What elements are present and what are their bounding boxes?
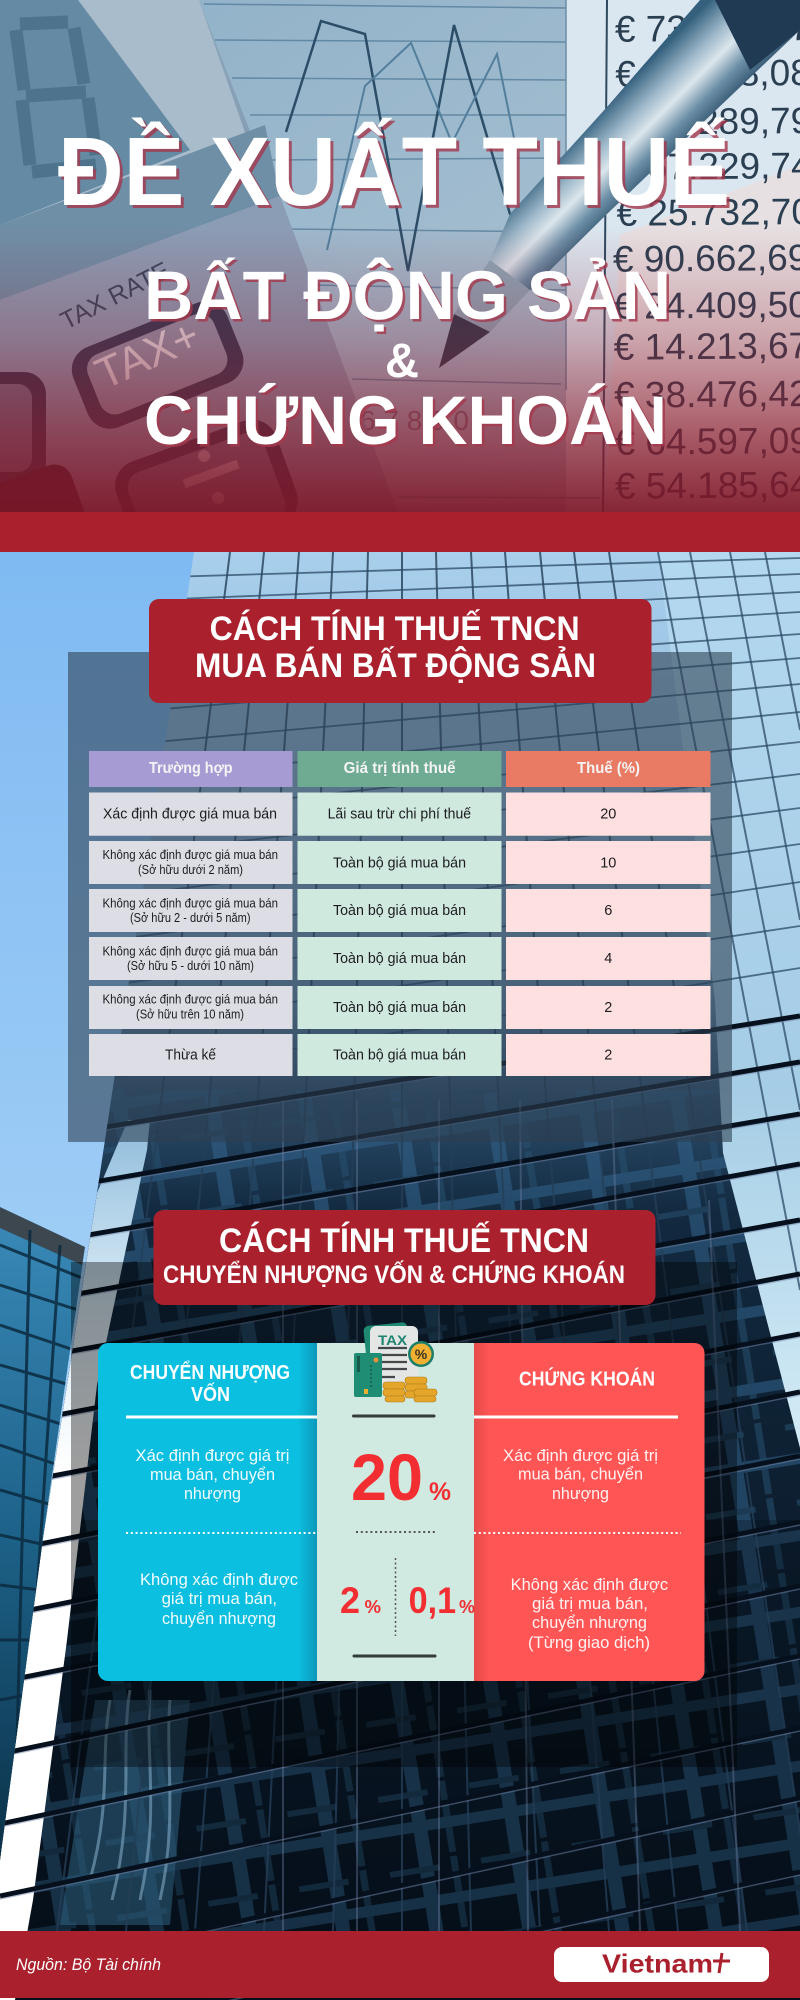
section heading: real estate: [149, 599, 652, 703]
table header row: Giá trị tính thuế: [344, 760, 456, 777]
card: capital transfer: giá trị mua bán,: [162, 1589, 277, 1608]
card: securities: mua bán, chuyển: [518, 1464, 643, 1484]
table header row: [89, 751, 710, 787]
table text: Lãi sau trừ chi phí thuế: [328, 806, 471, 822]
hero photo: calculator, chart, pen and figures: 6 7 8 9 0: [360, 405, 469, 436]
table text: Thừa kế: [165, 1048, 216, 1064]
card: capital transfer: Xác định được giá trị: [136, 1446, 290, 1465]
card: capital transfer: CHUYỂN NHƯỢNG: [130, 1361, 290, 1384]
rate: 2 percent: 2: [340, 1580, 360, 1621]
table header row: Trường hợp: [149, 760, 233, 777]
logo: Vietnam+: [554, 1947, 769, 1982]
card: capital transfer: nhượng: [184, 1484, 241, 1503]
card: capital transfer: mua bán, chuyển: [150, 1465, 275, 1484]
table text: Không xác định được giá mua bán: [102, 945, 278, 959]
rate: 2 percent: %: [364, 1597, 381, 1617]
table text: Không xác định được giá mua bán: [102, 896, 278, 910]
section heading: capital transfer and securities: CHUYỂN NHƯỢNG VỐN & CHỨNG KHOÁN: [163, 1259, 625, 1289]
icon: tax document, card and coins: %: [415, 1346, 428, 1362]
hero title: BẤT ĐỘNG SẢN: [146, 260, 674, 336]
hero title: CHỨNG KHOÁN: [144, 382, 667, 459]
hero title: CHỨNG KHOÁN: [146, 384, 670, 462]
table text: (Sở hữu 2 - dưới 5 năm): [130, 911, 250, 925]
section heading: capital transfer and securities: [154, 1210, 656, 1305]
hero title: ĐỀ XUẤT THUẾ: [58, 117, 730, 226]
source note: Nguồn: Bộ Tài chính: [16, 1955, 161, 1974]
table text: 2: [604, 1000, 612, 1016]
hero title: &: [385, 335, 419, 388]
card: securities: [474, 1343, 705, 1681]
table text: [102, 806, 616, 1064]
table text: Toàn bộ giá mua bán: [333, 1000, 466, 1016]
hero photo: calculator, chart, pen and figures: TAX+: [88, 310, 207, 399]
logo: Vietnam+: Vietnam: [602, 1948, 713, 1978]
section heading: capital transfer and securities: CÁCH TÍNH THUẾ TNCN: [219, 1222, 589, 1260]
tax table: [89, 751, 710, 1076]
table text: 10: [600, 856, 616, 872]
footer bar: [0, 1931, 800, 1998]
table text: Toàn bộ giá mua bán: [333, 1048, 466, 1064]
section heading: real estate: MUA BÁN BẤT ĐỘNG SẢN: [195, 646, 596, 685]
rate: 0,1 percent: 0,1: [409, 1580, 456, 1621]
table text: Không xác định được giá mua bán: [102, 848, 278, 862]
icon: tax document, card and coins: TAX: [378, 1333, 407, 1348]
card: securities: Không xác định được: [511, 1575, 669, 1594]
card: capital transfer: [98, 1343, 317, 1681]
table text: Toàn bộ giá mua bán: [333, 951, 466, 967]
rate: 2 percent: [340, 1580, 381, 1621]
rate: 20 percent: %: [429, 1478, 451, 1506]
table text: Xác định được giá mua bán: [103, 806, 277, 822]
hero photo: calculator, chart, pen and figures: TAX RATE: [56, 257, 174, 335]
table header row: Thuế (%): [577, 760, 640, 777]
card: securities: chuyển nhượng: [532, 1613, 647, 1632]
table text: (Sở hữu trên 10 năm): [136, 1008, 244, 1022]
table text: 20: [600, 806, 616, 822]
table text: (Sở hữu 5 - dưới 10 năm): [127, 959, 254, 973]
comparison cards: [98, 1343, 705, 1681]
hero title: [58, 117, 733, 462]
card: securities: nhượng: [552, 1484, 609, 1503]
table column fills: [89, 792, 710, 1076]
card: capital transfer: chuyển nhượng: [162, 1609, 276, 1628]
red band: [0, 512, 800, 552]
section heading: real estate: CÁCH TÍNH THUẾ TNCN: [210, 610, 580, 648]
hero title: BẤT ĐỘNG SẢN: [144, 257, 671, 334]
card: securities: giá trị mua bán,: [532, 1594, 648, 1613]
card: capital transfer: Không xác định được: [140, 1570, 298, 1589]
rate: 0,1 percent: %: [459, 1597, 475, 1617]
card: securities: CHỨNG KHOÁN: [519, 1367, 655, 1391]
card: securities: Xác định được giá trị: [503, 1446, 658, 1465]
card: capital transfer: VỐN: [191, 1382, 230, 1406]
panel: real-estate backdrop: [68, 652, 732, 1142]
table text: Không xác định được giá mua bán: [102, 993, 278, 1007]
table text: 4: [604, 951, 612, 967]
card: rates column: [317, 1343, 475, 1681]
table text: Toàn bộ giá mua bán: [333, 903, 466, 919]
table text: (Sở hữu dưới 2 năm): [138, 863, 243, 877]
building photo background: [0, 552, 800, 2000]
table text: 2: [604, 1048, 612, 1064]
card: securities: (Từng giao dịch): [528, 1633, 650, 1652]
table text: 6: [604, 903, 612, 919]
icon: tax document, card and coins: [354, 1322, 437, 1402]
table text: Toàn bộ giá mua bán: [333, 856, 466, 872]
rate: 20 percent: 20: [351, 1440, 423, 1514]
panel: securities backdrop: [71, 1262, 737, 1767]
hero title: ĐỀ XUẤT THUẾ: [61, 120, 733, 229]
hero photo: calculator, chart, pen and figures: [0, 0, 800, 512]
